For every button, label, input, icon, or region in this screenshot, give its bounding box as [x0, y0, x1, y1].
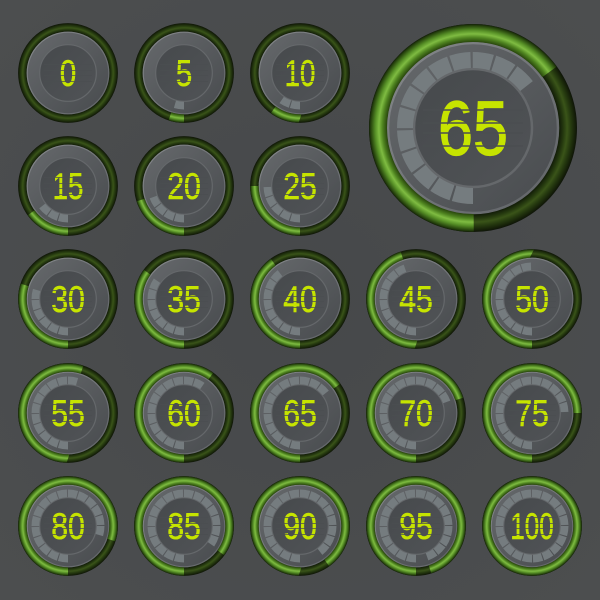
value: 25: 25	[283, 166, 317, 207]
value: 45: 45	[399, 279, 433, 320]
value: 85: 85	[167, 506, 201, 547]
value: 70: 70	[399, 393, 433, 434]
value: 55: 55	[51, 393, 85, 434]
value: 95: 95	[399, 506, 433, 547]
large gauge: 65	[378, 33, 568, 223]
value: 80: 80	[51, 506, 85, 547]
value: 50: 50	[515, 279, 549, 320]
gauge: 90	[254, 480, 346, 572]
value: 75: 75	[515, 393, 549, 434]
gauge: 50	[486, 253, 578, 345]
gauge: 35	[138, 253, 230, 345]
gauge: 85	[138, 480, 230, 572]
gauge: 55	[22, 367, 114, 459]
value: 30: 30	[51, 279, 85, 320]
value: 10: 10	[285, 53, 315, 94]
gauge: 75	[486, 367, 578, 459]
value: 40: 40	[283, 279, 317, 320]
value: 100: 100	[510, 506, 554, 547]
value: 0: 0	[60, 53, 76, 94]
large value: 65: 65	[438, 86, 508, 172]
gauge: 80	[22, 480, 114, 572]
value: 5: 5	[176, 53, 192, 94]
value: 35: 35	[167, 279, 201, 320]
gauge: 5	[138, 27, 230, 119]
gauge: 70	[370, 367, 462, 459]
gauge: 60	[138, 367, 230, 459]
gauge: 20	[138, 140, 230, 232]
gauge: 30	[22, 253, 114, 345]
gauge: 40	[254, 253, 346, 345]
gauge: 10	[254, 27, 346, 119]
gauge: 95	[370, 480, 462, 572]
gauge: 65	[254, 367, 346, 459]
gauge: 100	[486, 480, 578, 572]
gauge: 25	[254, 140, 346, 232]
value: 20: 20	[167, 166, 201, 207]
gauge: 15	[22, 140, 114, 232]
gauge: 0	[22, 27, 114, 119]
value: 60: 60	[167, 393, 201, 434]
value: 90: 90	[283, 506, 317, 547]
gauge: 45	[370, 253, 462, 345]
value: 65: 65	[283, 393, 317, 434]
value: 15: 15	[53, 166, 83, 207]
